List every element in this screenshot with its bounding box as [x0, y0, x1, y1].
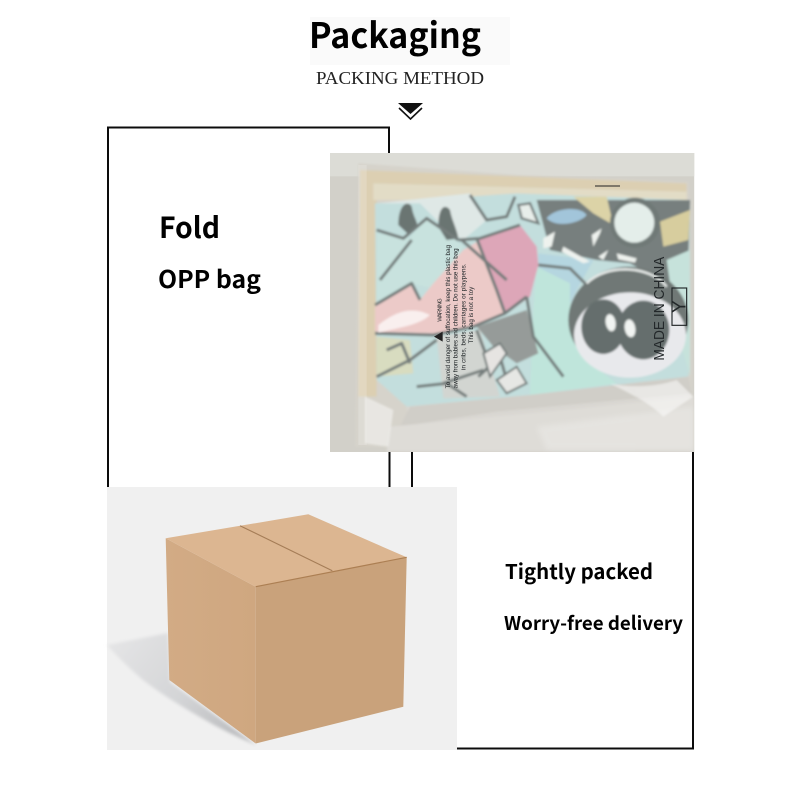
text: fold: Fold — [159, 205, 220, 247]
subtitle: PACKING METHOD — [316, 68, 484, 88]
box top face — [166, 514, 407, 587]
print: small ring — [608, 196, 646, 226]
garment: mint centre — [538, 268, 570, 307]
garment: pale top left — [386, 193, 486, 239]
size tag and label text: Y — [668, 300, 689, 313]
text: tightly packed: Tightly packed — [505, 555, 653, 585]
box shadow — [107, 633, 256, 745]
title: Packaging — [309, 8, 481, 59]
garment: blue panel — [538, 254, 592, 299]
garment: lower pink — [375, 240, 505, 333]
text: worry-free delivery: Worry-free delivery — [504, 609, 683, 636]
plastic lower flap — [407, 377, 694, 433]
print: round face — [567, 265, 690, 345]
print: white accents — [518, 203, 538, 223]
warning text on bag: in cribs, beds, carriages or playpens. — [460, 263, 467, 370]
warning text on bag: WARNING — [438, 298, 444, 322]
text: OPP bag: OPP bag — [158, 260, 261, 295]
plastic glare — [358, 165, 693, 450]
size tag and label text: MADE IN CHINA — [651, 257, 668, 361]
warning text on bag: This bag is not a toy — [468, 286, 475, 343]
garment: mint panel — [377, 217, 463, 303]
plastic bag — [360, 164, 486, 174]
frame lines — [108, 128, 693, 748]
photo: cardboard box scene — [107, 487, 457, 750]
icon: down arrow — [398, 103, 423, 119]
warning text on bag: To avoid danger of suffocation, keep this plastic bag — [445, 245, 452, 388]
garment: dark blobs — [398, 204, 417, 233]
box seam — [240, 526, 332, 571]
garment: grey panel — [477, 310, 538, 363]
warning text on bag: away from babies and children. Do not use this bag — [453, 248, 460, 388]
box right face — [256, 557, 407, 744]
warning text on bag — [434, 245, 475, 388]
size tag and label text — [654, 256, 688, 360]
garment: dark print field — [537, 200, 690, 290]
print: face dark figure — [581, 299, 625, 354]
garment: warning text area — [437, 330, 500, 398]
print outlines — [375, 195, 585, 397]
garment: pink panel — [477, 225, 538, 315]
box backdrop — [107, 487, 457, 750]
infographic canvas — [107, 20, 694, 750]
photo: folded garment in OPP bag — [330, 153, 694, 452]
garment base — [375, 193, 690, 407]
garment: yellow patch — [377, 337, 413, 377]
box left face — [166, 538, 256, 744]
